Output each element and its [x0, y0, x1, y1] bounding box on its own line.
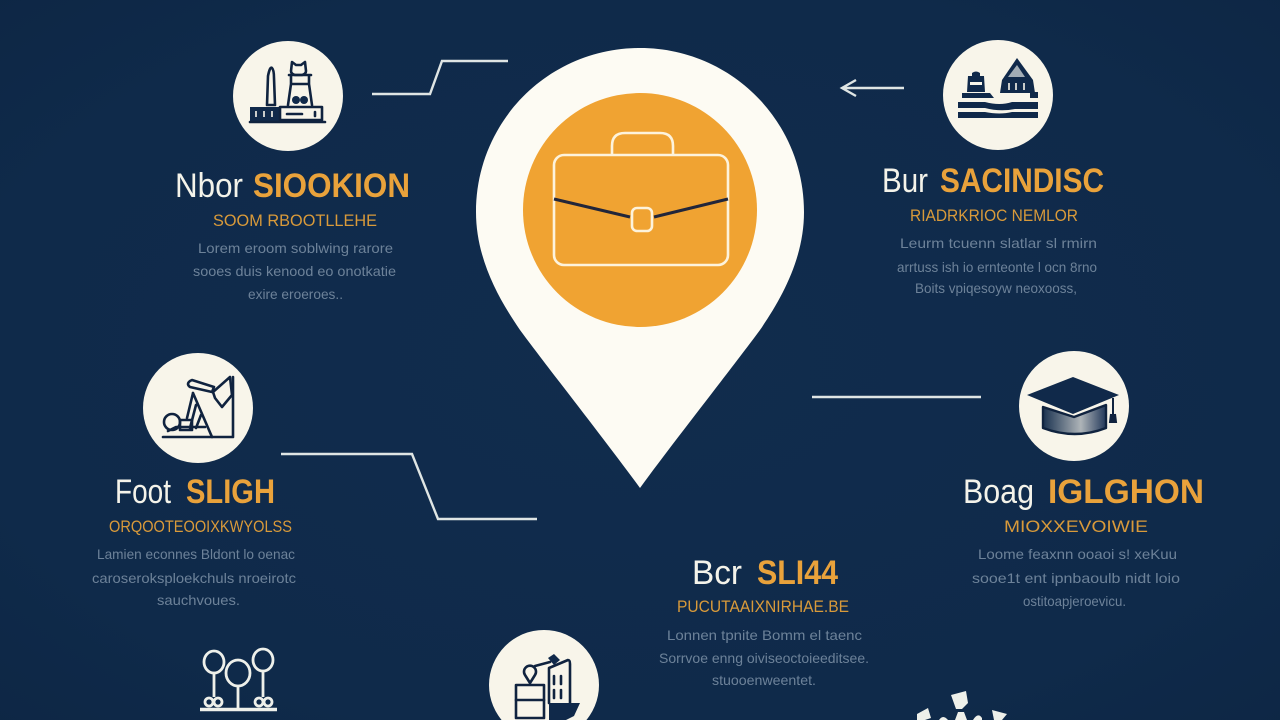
icon circle: pump jack: [143, 353, 253, 463]
panel: bottom center: [489, 554, 869, 720]
body text: [193, 240, 396, 302]
heading: IGLGHON: [1048, 473, 1204, 511]
body text: Lamien econnes Bldont lo oenac: [97, 546, 295, 562]
subheading: SOOM RBOOTLLEHE: [213, 211, 377, 230]
heading: Nbor: [175, 167, 243, 205]
central location pin: [476, 48, 804, 488]
arrow: top right: [842, 80, 904, 96]
heading: SLI44: [757, 554, 838, 592]
connector: middle left: [281, 454, 537, 519]
subheading: ORQOOTEOOIXKWYOLSS: [109, 517, 292, 536]
panel: top left: [175, 41, 410, 302]
heading: Bcr: [692, 554, 742, 592]
orange circle: [523, 93, 757, 327]
body text: ostitoapjeroevicu.: [1023, 593, 1126, 609]
body text: caroseroksploekchuls nroeirotc: [92, 570, 296, 586]
panel: middle right: [963, 351, 1204, 609]
body text: arrtuss ish io ernteonte l ocn 8rno: [897, 259, 1097, 275]
body text: stuooenweentet.: [712, 672, 816, 688]
heading: SACINDISC: [940, 162, 1104, 200]
panel: middle left: [92, 353, 296, 608]
body text: sauchvoues.: [157, 592, 240, 608]
icon circle: house and water: [943, 40, 1053, 150]
body text: Sorrvoe enng oiviseoctoieeditsee.: [659, 650, 869, 666]
icon: briefcase: [554, 133, 728, 265]
heading: Foot: [115, 473, 171, 511]
body text: sooes duis kenood eo onotkatie: [193, 263, 396, 279]
subheading: PUCUTAAIXNIRHAE.BE: [677, 597, 849, 616]
connector: top left: [372, 61, 508, 94]
body text: Lorem eroom soblwing rarore: [198, 240, 393, 256]
subheading: MIOXXEVOIWIE: [1004, 517, 1148, 536]
body text: Loome feaxnn ooaoi s! xeKuu: [978, 546, 1177, 562]
heading: Bur: [882, 162, 928, 200]
subheading: RIADRKRIOC NEMLOR: [910, 206, 1078, 225]
body text: [972, 546, 1180, 609]
body text: Lonnen tpnite Bomm el taenc: [667, 627, 862, 643]
connector: middle right: [812, 396, 981, 398]
icon circle: graduation cap: [1019, 351, 1129, 461]
body text: [92, 546, 296, 608]
icon circle: factory: [233, 41, 343, 151]
icon: three balloons: [200, 649, 277, 710]
icon circle: building and pin: [489, 630, 599, 720]
body text: [897, 235, 1097, 296]
body text: exire eroeroes..: [248, 286, 343, 302]
heading: SIOOKION: [253, 167, 410, 205]
heading: Boag: [963, 473, 1034, 511]
body text: Boits vpiqesoyw neoxooss,: [915, 280, 1077, 296]
body text: Leurm tcuenn slatlar sl rmirn: [900, 235, 1097, 251]
body text: sooe1t ent ipnbaoulb nidt loio: [972, 570, 1180, 586]
panel: top right: [882, 40, 1104, 296]
heading: SLIGH: [186, 473, 275, 511]
icon: partial cut-off figures: [917, 691, 1007, 720]
body text: [659, 627, 869, 688]
